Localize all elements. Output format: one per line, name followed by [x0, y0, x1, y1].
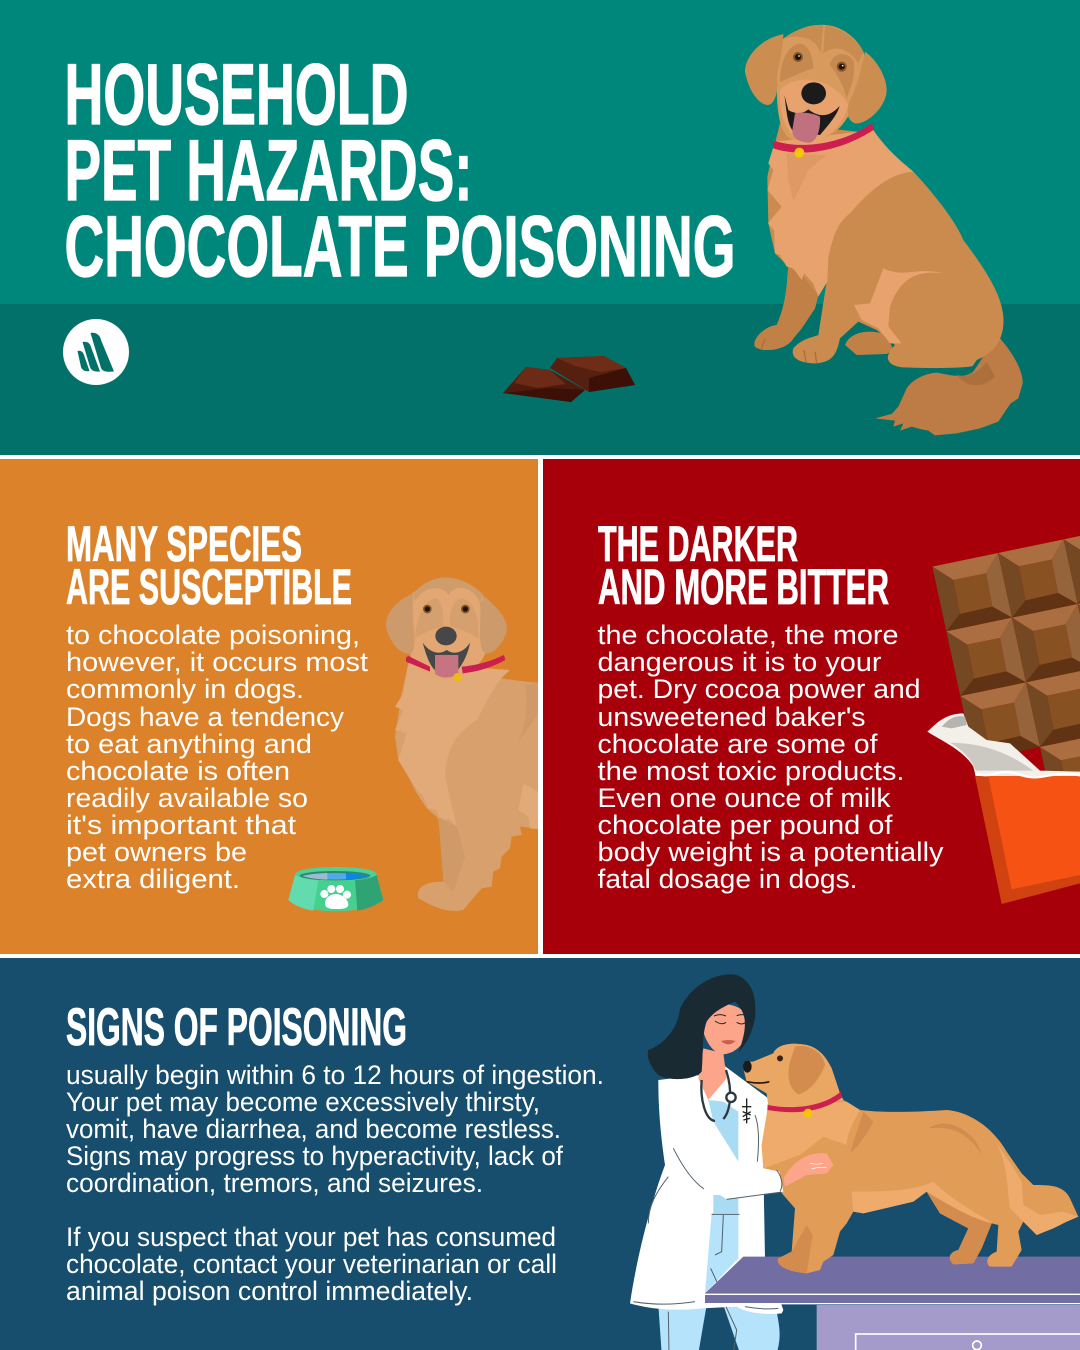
text block: many species body: chocolate is often — [66, 756, 290, 786]
vet hand — [783, 1153, 833, 1187]
dog eye patches — [415, 598, 479, 638]
heading: the darker: AND MORE BITTER — [598, 559, 889, 615]
dog chest shade — [787, 153, 827, 202]
dog nose — [801, 82, 826, 104]
heading: many species: ARE SUSCEPTIBLE — [66, 559, 352, 615]
dog muzzle — [780, 80, 848, 142]
dog collar — [767, 1092, 842, 1112]
title: PET HAZARDS: — [64, 123, 472, 219]
cabinet drawer — [856, 1334, 1080, 1350]
text block: many species body: to eat anything and — [66, 729, 312, 759]
dog body — [395, 663, 547, 911]
text block: call to action: animal poison control immediately. — [66, 1276, 473, 1306]
coat emblem — [742, 1098, 751, 1123]
dog haunch fur — [854, 268, 943, 343]
wrapper torn edge — [975, 772, 1080, 777]
paw print — [320, 885, 351, 909]
stethoscope chest piece — [726, 1093, 736, 1102]
text block: darker chocolate body: chocolate are some of — [598, 729, 878, 759]
drawer knob — [973, 1341, 981, 1350]
vet hand lines — [810, 1163, 827, 1169]
dog ear — [788, 1046, 825, 1094]
dog collar — [773, 123, 874, 153]
text block: darker chocolate body: fatal dosage in dogs. — [598, 864, 858, 894]
table cabinet — [817, 1305, 1080, 1350]
text block: signs description: Your pet may become excessively thirsty, — [66, 1087, 540, 1117]
stethoscope — [701, 1070, 730, 1121]
text block: call to action — [66, 1222, 557, 1306]
vet lips — [721, 1040, 736, 1044]
table top — [705, 1257, 1080, 1303]
text block: signs description: coordination, tremors, and seizures. — [66, 1168, 483, 1198]
dog front leg shade — [754, 267, 818, 350]
dog eye patches — [780, 43, 854, 98]
vet sleeve — [702, 1163, 783, 1199]
dog nose — [435, 627, 457, 645]
title — [64, 47, 736, 295]
dog eye — [777, 1055, 783, 1061]
dog mouth — [784, 95, 840, 135]
heading: many species: MANY SPECIES — [66, 516, 302, 572]
icon: logo — [63, 319, 129, 385]
dog body — [743, 1044, 1078, 1273]
dog leg shade — [438, 817, 445, 882]
dog shoulder shade — [517, 683, 540, 745]
panel: header — [0, 0, 1080, 455]
text block: darker chocolate body: Even one ounce of milk — [598, 783, 891, 813]
vet hair — [648, 974, 755, 1079]
vet shirt — [708, 1100, 738, 1213]
text block: call to action: If you suspect that your pet has consumed — [66, 1222, 556, 1252]
dog tongue — [792, 113, 820, 143]
table edge — [705, 1294, 1080, 1304]
dog tail shade — [957, 362, 995, 385]
text block: signs description: Signs may progress to hyperactivity, lack of — [66, 1141, 563, 1171]
vet head — [704, 1004, 745, 1054]
heading: the darker: THE DARKER — [598, 516, 798, 572]
panel: signs of poisoning — [0, 958, 1080, 1350]
dog nose — [743, 1061, 752, 1073]
heading: signs of poisoning: SIGNS OF POISONING — [66, 998, 407, 1057]
dog tail — [875, 338, 1023, 435]
panel: many species — [0, 459, 547, 954]
dog chest — [395, 663, 510, 827]
dog chest — [767, 130, 913, 297]
text block: darker chocolate body: the chocolate, the more — [598, 620, 898, 650]
dog forehead patches — [413, 577, 483, 603]
vet eyes and brows — [714, 1015, 748, 1024]
dog tag — [804, 1109, 812, 1117]
text block: darker chocolate body: body weight is a potentially — [598, 837, 944, 867]
text block: many species body — [66, 620, 369, 894]
text block: many species body: readily available so — [66, 783, 308, 813]
dog hip fur — [518, 784, 538, 830]
vet ear — [694, 1011, 706, 1029]
dog tag — [453, 673, 462, 682]
vet coat creases — [633, 1115, 778, 1350]
torn foil — [927, 713, 1080, 777]
text block: darker chocolate body: chocolate per pound of — [598, 810, 893, 840]
text block: signs description: vomit, have diarrhea, and become restless. — [66, 1114, 561, 1144]
dog tongue — [435, 655, 458, 677]
dog mouth — [423, 643, 470, 672]
dog collar — [406, 655, 505, 673]
text block: many species body: extra diligent. — [66, 864, 240, 894]
icon: chocolate bar — [927, 526, 1080, 904]
icon: chocolate pieces — [503, 356, 635, 402]
title: HOUSEHOLD — [64, 47, 408, 143]
orange wrapper — [975, 776, 1080, 904]
dog head light — [743, 1044, 843, 1112]
text block: call to action: chocolate, contact your veterinarian or call — [66, 1249, 557, 1279]
dog light fur — [762, 1102, 1078, 1235]
panel: darker chocolate — [543, 459, 1080, 954]
illustration: vet with dog on table — [630, 974, 1080, 1350]
text block: darker chocolate body: the most toxic products. — [598, 756, 904, 786]
vet coat — [630, 1065, 783, 1314]
vet trousers — [705, 1213, 738, 1293]
dog ears — [745, 34, 887, 123]
dog head — [410, 588, 486, 667]
text block: many species body: however, it occurs most — [66, 647, 369, 677]
dog mouth — [747, 1082, 769, 1083]
text block: signs description — [66, 1060, 604, 1198]
heading: many species — [66, 516, 352, 615]
icon: water bowl — [288, 867, 383, 911]
heading: the darker — [598, 516, 889, 615]
text block: darker chocolate body: unsweetened baker's — [598, 702, 866, 732]
text block: darker chocolate body — [598, 620, 944, 894]
dog eyes — [793, 52, 847, 72]
bar segments — [932, 526, 1080, 812]
vet sleeve cuff — [727, 1170, 782, 1199]
text block: darker chocolate body: dangerous it is to your — [598, 647, 882, 677]
dog near paw toes — [762, 338, 817, 363]
dog tag — [794, 148, 804, 158]
icon: sitting golden retriever — [745, 25, 1023, 435]
text block: signs description: usually begin within 6 to 12 hours of ingestion. — [66, 1060, 604, 1090]
dog darker fur — [778, 1112, 992, 1273]
text block: many species body: it's important that — [66, 810, 297, 840]
text block: many species body: to chocolate poisoning, — [66, 620, 360, 650]
dog ears — [386, 593, 507, 654]
icon: front-facing golden retriever — [288, 577, 547, 911]
text block: many species body: Dogs have a tendency — [66, 702, 345, 732]
vet neck — [698, 1048, 727, 1100]
text block: many species body: pet owners be — [66, 837, 247, 867]
vet trouser lines — [711, 1214, 739, 1285]
dog eyes — [423, 605, 470, 613]
dog far paw — [845, 332, 893, 355]
vet legs — [658, 1305, 780, 1350]
dog forehead patches — [785, 25, 863, 63]
text block: darker chocolate body: pet. Dry cocoa power and — [598, 674, 920, 704]
text block: many species body: commonly in dogs. — [66, 674, 304, 704]
dog head — [777, 25, 865, 141]
dog body — [754, 123, 1003, 368]
